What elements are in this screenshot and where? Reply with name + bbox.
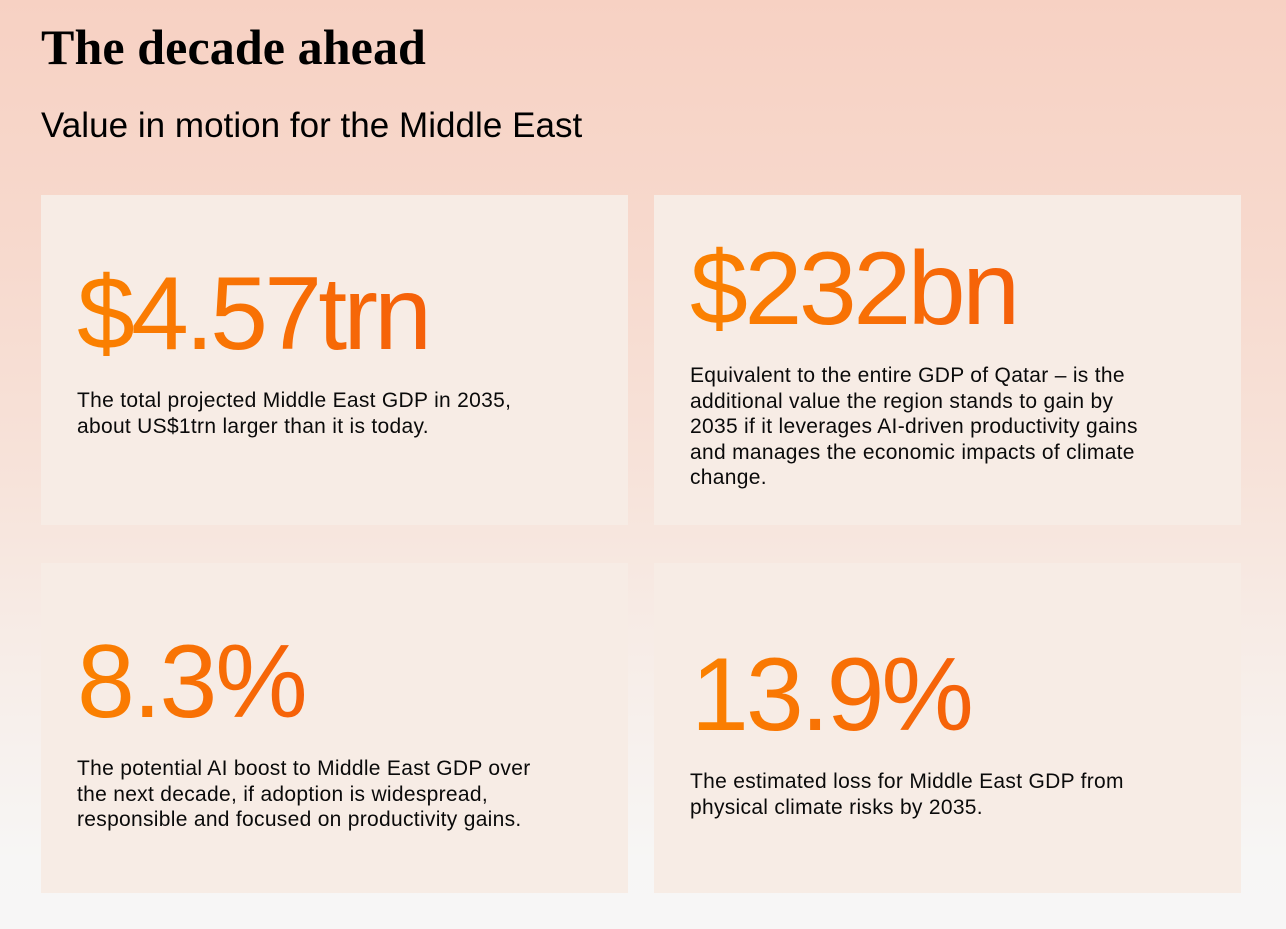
stat: 8.3%: 8.3% xyxy=(77,624,306,740)
description: AI boost: responsible and focused on productivity gains. xyxy=(77,808,522,831)
description: AI boost: the next decade, if adoption is widespread, xyxy=(77,783,488,806)
description: additional value: and manages the economic impacts of climate xyxy=(690,441,1135,464)
stat: $4.57trn: $4.57trn xyxy=(77,256,428,372)
description: AI boost xyxy=(77,757,530,831)
description: additional value: Equivalent to the entire GDP of Qatar – is the xyxy=(690,364,1125,387)
description: projected GDP xyxy=(77,389,511,438)
description: climate loss: physical climate risks by 2035. xyxy=(690,796,983,819)
description: projected GDP: The total projected Middle East GDP in 2035, xyxy=(77,389,511,412)
subtitle: Value in motion for the Middle East xyxy=(41,106,582,145)
stat: 13.9%: 13.9% xyxy=(691,637,971,753)
stat: $232bn: $232bn xyxy=(690,231,1017,347)
description: climate loss: The estimated loss for Middle East GDP from xyxy=(690,770,1124,793)
panel: AI boost xyxy=(41,563,628,893)
description: projected GDP: about US$1trn larger than it is today. xyxy=(77,415,429,438)
description: additional value xyxy=(690,364,1138,489)
title: The decade ahead xyxy=(41,19,426,75)
description: climate loss xyxy=(690,770,1124,819)
description: AI boost: The potential AI boost to Middle East GDP over xyxy=(77,757,530,780)
description: additional value: additional value the region stands to gain by xyxy=(690,390,1113,413)
description: additional value: 2035 if it leverages AI-driven productivity gains xyxy=(690,415,1138,438)
panel: GDP 2035 xyxy=(41,195,628,525)
description: additional value: change. xyxy=(690,466,767,489)
panel: additional value xyxy=(654,195,1241,525)
panel: climate loss xyxy=(654,563,1241,893)
